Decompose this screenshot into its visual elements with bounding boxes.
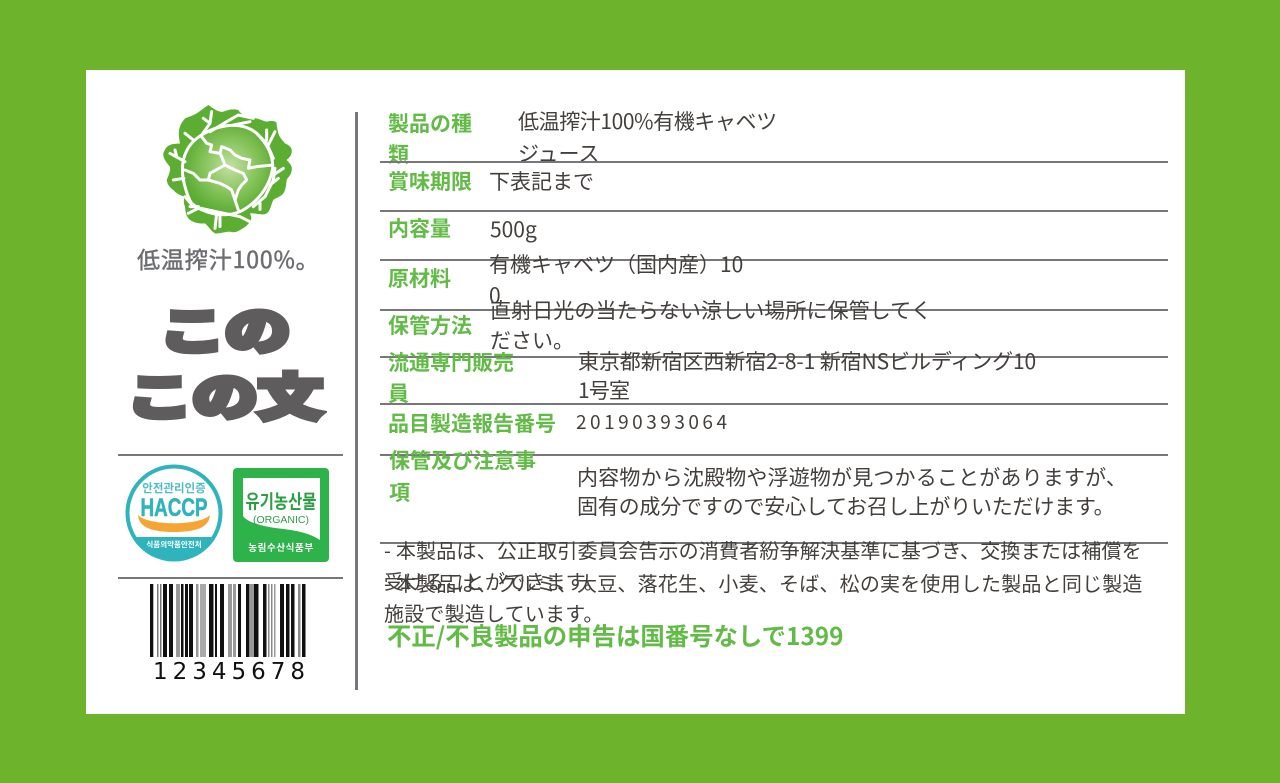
row rule 1 bbox=[380, 160, 1168, 163]
text: 類 bbox=[388, 139, 409, 169]
text: 1号室 bbox=[578, 375, 629, 405]
hotline callout: 不正/不良製品の申告は国番号なしで1399 bbox=[387, 618, 844, 653]
row rule 5 bbox=[380, 356, 1168, 358]
row: volume label: 内容量 bbox=[388, 213, 451, 243]
row: report number label: 品目製造報告番号 bbox=[388, 408, 556, 438]
text: 固有の成分ですので安心してお召し上がりいただけます。 bbox=[577, 491, 1114, 521]
vertical divider bbox=[355, 112, 358, 690]
divider: left column lower bbox=[118, 577, 343, 579]
row: storage label: 保管方法 bbox=[388, 310, 472, 340]
row: volume value: 500g bbox=[490, 214, 537, 244]
text: 施設で製造しています。 bbox=[384, 598, 604, 627]
row: distributor value: 東京都新宿区西新宿2-8-1 新宿NSビルディング10 bbox=[578, 346, 1036, 376]
row: report number value: 20190393064 bbox=[576, 408, 730, 435]
row: ingredients label: 原材料 bbox=[388, 263, 451, 293]
text: ジュース bbox=[518, 138, 599, 168]
icon: HACCP badge: 식품의약품안전처 bbox=[146, 539, 202, 550]
notice: compensation: - 本製品は、公正取引委員会告示の消費者紛争解決基準に基づき、交換または補償を bbox=[384, 535, 1142, 564]
row rule 6 bbox=[380, 402, 1168, 405]
row: distributor label: 流通専門販売 bbox=[388, 347, 514, 377]
row: ingredients value: 有機キャベツ（国内産）10 bbox=[489, 249, 743, 279]
title: brand wordmark: この文 bbox=[127, 358, 323, 430]
icon: organic certification badge bbox=[233, 468, 329, 562]
row: precautions value: 内容物から沈殿物や浮遊物が見つかることがありますが、 bbox=[577, 462, 1127, 492]
icon: organic certification badge: 농림수산식품부 bbox=[248, 540, 314, 554]
barcode number: 12345678 bbox=[153, 659, 310, 685]
title: brand wordmark bbox=[127, 292, 327, 430]
text: 員 bbox=[388, 378, 409, 408]
row: product type label: 製品の種 bbox=[388, 108, 472, 138]
title: brand wordmark: この bbox=[160, 292, 290, 364]
notice: allergens: - 本製品は、クルミ、大豆、落花生、小麦、そば、松の実を使用した製品と同じ製造 bbox=[384, 568, 1143, 597]
text: ださい。 bbox=[490, 325, 574, 355]
icon: barcode bbox=[150, 584, 306, 657]
icon: cabbage bbox=[163, 105, 292, 234]
text: 項 bbox=[389, 477, 410, 507]
row: storage value: 直射日光の当たらない涼しい場所に保管してく bbox=[490, 295, 932, 325]
text: 受けることができます。 bbox=[384, 566, 604, 595]
divider: left column upper bbox=[118, 454, 343, 456]
row: expiry label: 賞味期限 bbox=[388, 166, 472, 196]
row rule 7 bbox=[380, 454, 1168, 456]
row rule 2 bbox=[380, 210, 1168, 212]
tagline: cold pressed 100%: 低温搾汁100%。 bbox=[137, 241, 320, 275]
row rule 4 bbox=[380, 308, 1168, 311]
icon: HACCP badge bbox=[126, 464, 222, 562]
row: precautions label: 保管及び注意事 bbox=[389, 445, 536, 475]
panel: white label card bbox=[86, 70, 1185, 714]
row rule 3 bbox=[380, 258, 1168, 261]
icon: HACCP badge: 안전관리인증 bbox=[142, 480, 206, 496]
row rule 8 bbox=[380, 542, 1168, 544]
text: 0 bbox=[489, 280, 501, 310]
row: expiry value: 下表記まで bbox=[489, 166, 594, 196]
icon: organic certification badge: (ORGANIC) bbox=[253, 514, 309, 526]
row: product type value: 低温搾汁100%有機キャベツ bbox=[518, 106, 777, 136]
